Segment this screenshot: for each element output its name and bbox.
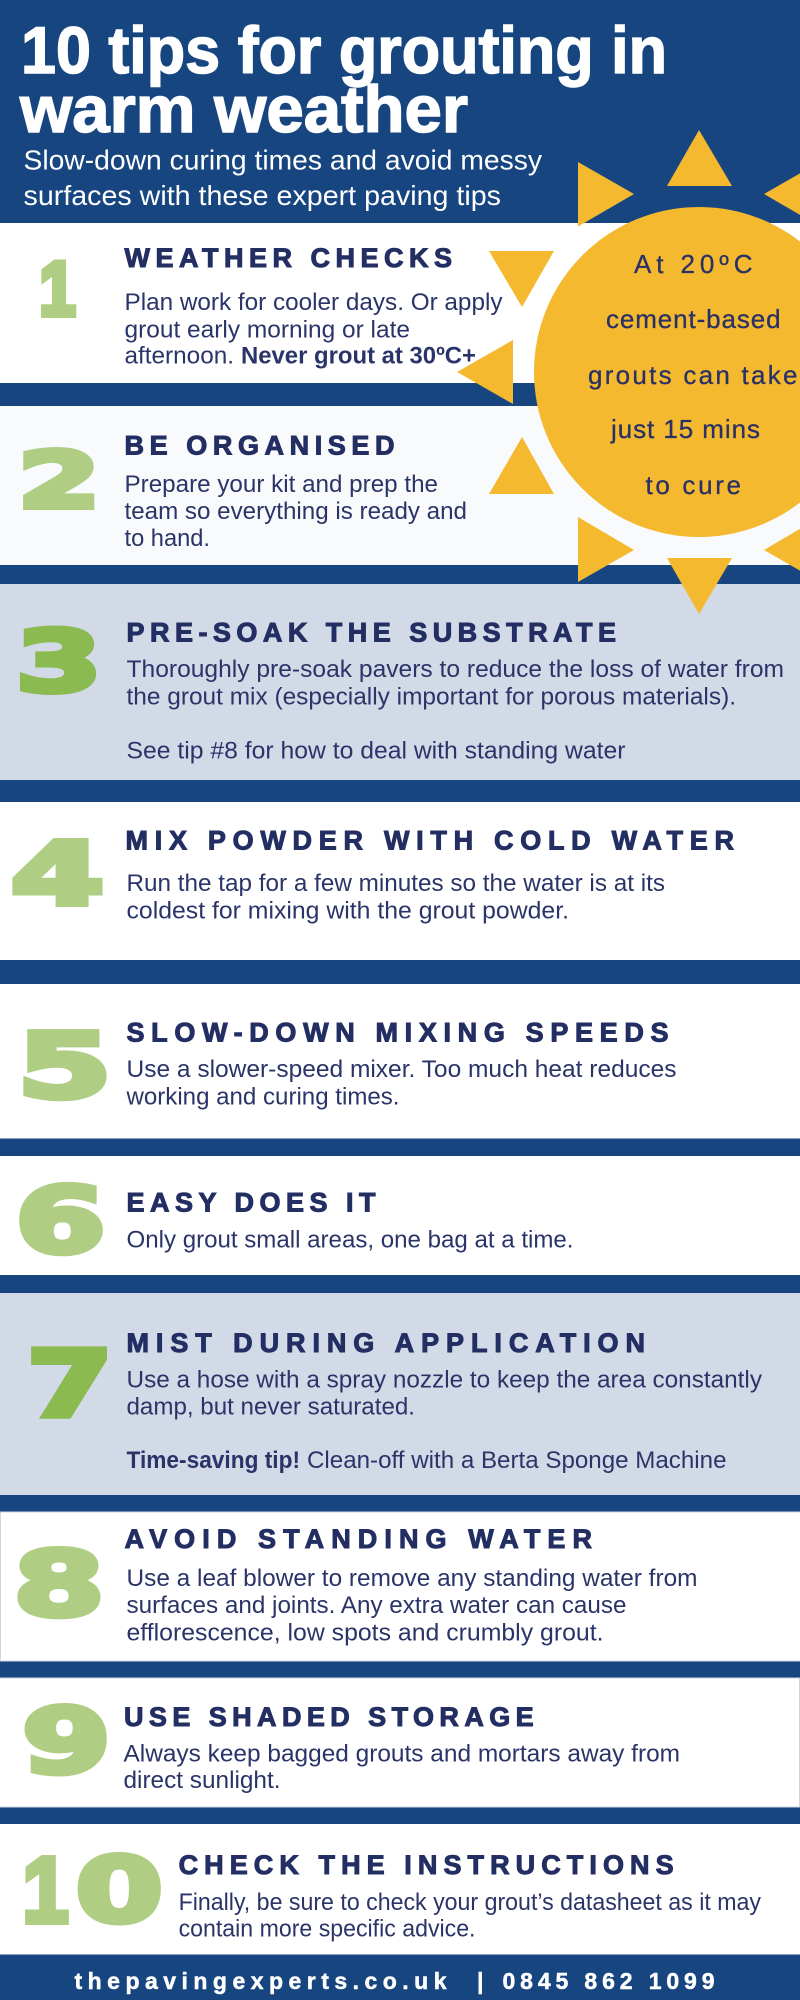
body text: direct sunlight. bbox=[124, 1767, 280, 1794]
number 1: 1 bbox=[40, 247, 76, 332]
icon: sun rays bbox=[457, 130, 800, 614]
callout text: At 20ºC bbox=[634, 249, 752, 279]
body text: to hand. bbox=[124, 525, 210, 552]
body text: Always keep bagged grouts and mortars away from bbox=[124, 1741, 680, 1768]
body text: grout early morning or late bbox=[124, 316, 410, 344]
body text: efflorescence, low spots and crumbly grout. bbox=[126, 1619, 604, 1646]
body text: Prepare your kit and prep the bbox=[124, 471, 438, 498]
number 6: 6 bbox=[16, 1169, 106, 1274]
body text: Only grout small areas, one bag at a time. bbox=[126, 1226, 574, 1253]
number 8: 8 bbox=[14, 1532, 104, 1636]
phone number: 0845 862 1099 bbox=[502, 1968, 714, 1994]
website: thepavingexperts.co.uk bbox=[74, 1968, 447, 1994]
callout text: grouts can take bbox=[588, 360, 798, 390]
heading: check the instructions: CHECK THE INSTRUCTIONS bbox=[179, 1850, 674, 1880]
panel: tip 1 bbox=[0, 223, 800, 383]
callout text: to cure bbox=[646, 470, 741, 500]
body text bbox=[124, 1741, 680, 1794]
panel: tip 9 bbox=[0, 1678, 800, 1807]
body text: working and curing times. bbox=[125, 1084, 399, 1110]
number 5: 5 bbox=[18, 1014, 112, 1118]
heading: use shaded storage: USE SHADED STORAGE bbox=[124, 1702, 534, 1732]
heading: mix powder with cold water: MIX POWDER WITH COLD WATER bbox=[126, 826, 734, 856]
number 3: 3 bbox=[16, 613, 102, 711]
body text: team so everything is ready and bbox=[124, 498, 467, 525]
body text: Use a slower-speed mixer. Too much heat reduces bbox=[126, 1056, 676, 1083]
subtitle: Slow-down curing times and avoid messy bbox=[24, 144, 542, 176]
body text: contain more specific advice. bbox=[179, 1916, 476, 1943]
callout text bbox=[588, 249, 798, 500]
body text bbox=[125, 1056, 677, 1110]
heading: be organised: BE ORGANISED bbox=[124, 431, 394, 461]
body text bbox=[179, 1889, 761, 1943]
body text: Thoroughly pre-soak pavers to reduce the loss of water from bbox=[126, 656, 784, 683]
body text: Use a leaf blower to remove any standing water from bbox=[126, 1565, 698, 1592]
heading: easy does it: EASY DOES IT bbox=[126, 1188, 376, 1218]
body text: Plan work for cooler days. Or apply bbox=[124, 289, 503, 316]
heading: avoid standing water: AVOID STANDING WATER bbox=[124, 1524, 592, 1554]
body text: Finally, be sure to check your grout’s datasheet as it may bbox=[179, 1889, 761, 1916]
body text: the grout mix (especially important for porous materials). bbox=[126, 684, 736, 710]
number 2: 2 bbox=[18, 437, 100, 526]
panel: tip 10 bbox=[0, 1824, 800, 1954]
body text: Never grout at 30ºC+ bbox=[241, 343, 476, 370]
body text: coldest for mixing with the grout powder. bbox=[126, 897, 569, 924]
body text: Use a hose with a spray nozzle to keep the area constantly bbox=[126, 1366, 762, 1393]
heading: pre-soak the substrate: PRE-SOAK THE SUBSTRATE bbox=[126, 618, 616, 648]
panel: tip 5 bbox=[0, 984, 800, 1138]
header bbox=[19, 13, 667, 211]
icon: sun disc bbox=[534, 207, 800, 537]
heading: slow-down mixing speeds: SLOW-DOWN MIXING SPEEDS bbox=[126, 1018, 668, 1048]
heading: mist during application: MIST DURING APPLICATION bbox=[126, 1328, 645, 1358]
body text: Run the tap for a few minutes so the water is at its bbox=[126, 870, 665, 897]
panel: tip 6 bbox=[0, 1156, 800, 1275]
body text: damp, but never saturated. bbox=[126, 1394, 415, 1420]
number 10 bbox=[22, 1838, 163, 1942]
body text bbox=[126, 1366, 762, 1474]
number 7: 7 bbox=[27, 1333, 113, 1438]
body text bbox=[126, 870, 665, 924]
footer bbox=[74, 1968, 714, 1994]
subtitle: surfaces with these expert paving tips bbox=[24, 180, 501, 211]
body text bbox=[126, 656, 784, 765]
panel: tip 3 bbox=[0, 584, 800, 780]
body text: surfaces and joints. Any extra water can cause bbox=[126, 1592, 626, 1619]
title bbox=[19, 13, 667, 146]
body text bbox=[126, 1565, 698, 1646]
body text: Clean-off with a Berta Sponge Machine bbox=[307, 1447, 726, 1474]
sun callout bbox=[457, 130, 800, 614]
number 10: 0 bbox=[76, 1838, 163, 1942]
body text bbox=[124, 289, 503, 370]
title: 10 tips for grouting in bbox=[21, 13, 667, 87]
body text bbox=[124, 471, 467, 552]
body text: afternoon. bbox=[124, 343, 234, 370]
panel: tip 8 bbox=[0, 1512, 800, 1661]
heading: weather checks: WEATHER CHECKS bbox=[124, 243, 452, 273]
callout text: cement-based bbox=[606, 304, 781, 334]
panel: tip 4 bbox=[0, 802, 800, 960]
panel: tip 7 bbox=[0, 1293, 800, 1495]
number 9: 9 bbox=[22, 1689, 111, 1793]
number 10: 1 bbox=[22, 1838, 68, 1942]
subtitle bbox=[24, 144, 542, 211]
callout text: just 15 mins bbox=[610, 414, 760, 444]
title: warm weather bbox=[19, 72, 468, 146]
number 4: 4 bbox=[11, 825, 104, 925]
panel: tip 2 bbox=[0, 406, 800, 565]
body text: See tip #8 for how to deal with standing water bbox=[126, 738, 626, 765]
separator: | bbox=[477, 1968, 483, 1994]
body text: Time-saving tip! bbox=[126, 1447, 300, 1474]
